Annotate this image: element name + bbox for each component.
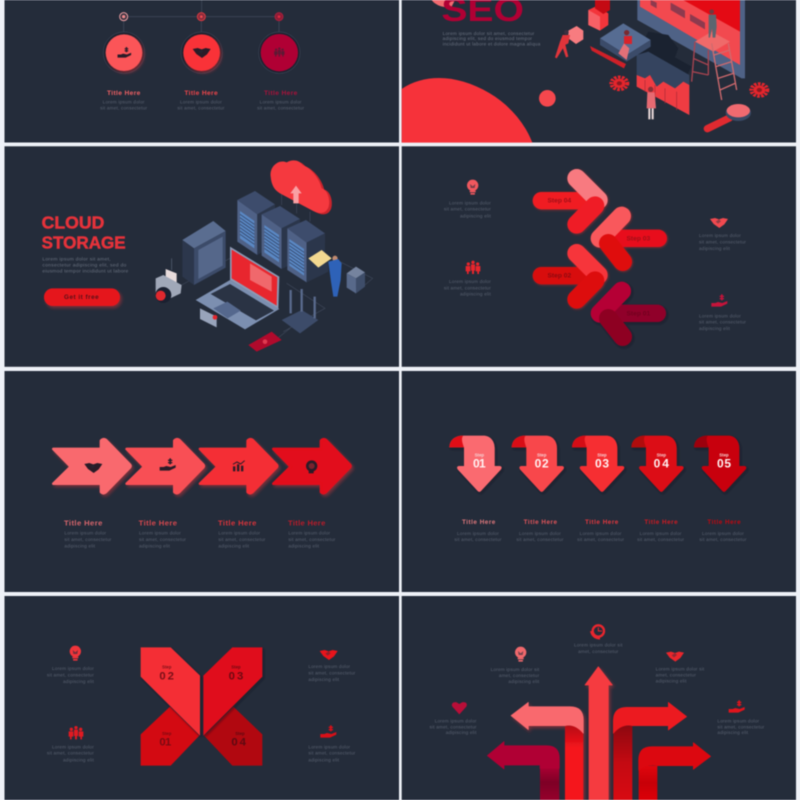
icon: camera bbox=[155, 258, 182, 303]
icon: router bbox=[282, 289, 318, 333]
text: bottom left: Lorem ipsum dolor bbox=[449, 279, 491, 284]
node 2 bbox=[197, 13, 205, 21]
text: far left: sit amet, consectetur bbox=[429, 724, 477, 729]
illustration: monitor bbox=[637, 0, 745, 78]
step 1 text: Title Here bbox=[64, 518, 102, 527]
step 3 text: sit amet, consectetur bbox=[257, 106, 304, 111]
step 3 text: Title Here bbox=[264, 90, 298, 97]
small circle bbox=[539, 90, 556, 107]
icon: server rack 2 bbox=[262, 206, 300, 269]
text: top left: sit amet, consectetur bbox=[444, 207, 491, 212]
step circle 2 bbox=[181, 32, 222, 73]
arrow 2 bbox=[127, 439, 204, 493]
arrow: step 02 bbox=[541, 253, 598, 299]
step 1 text bbox=[454, 519, 502, 542]
step 2 text: sit amet, consectetur bbox=[177, 106, 225, 111]
step 2 text: adipiscing elit bbox=[139, 544, 170, 549]
icon: server rack 1 bbox=[237, 191, 275, 255]
icon: cloud bbox=[271, 160, 332, 214]
step 3 text: sit amet, consectetur bbox=[218, 537, 266, 542]
segment 01: Step bbox=[162, 731, 172, 736]
text: left: adipiscing elit bbox=[508, 679, 540, 684]
panel: diverging arrows slide bbox=[402, 596, 796, 800]
text: top left: adipiscing elit bbox=[460, 213, 491, 218]
icon: drawer and worker bbox=[308, 250, 342, 297]
step 4 text: Lorem ipsum dolor bbox=[288, 531, 331, 536]
step 5 text: Lorem ipsum dolor bbox=[702, 531, 744, 536]
ribbon arrow 02: Step bbox=[537, 452, 547, 457]
text: right bbox=[656, 666, 705, 683]
step 4 text: Title Here bbox=[644, 519, 678, 526]
step labels bbox=[547, 198, 650, 317]
node 1 bbox=[120, 13, 128, 21]
step 5 text: Title Here bbox=[707, 519, 741, 526]
step 3 text: adipiscing elit bbox=[218, 544, 250, 549]
step 2 text: sit amet, consectetur bbox=[139, 537, 186, 542]
ribbon arrow 03: Step bbox=[597, 452, 607, 457]
step 1 text bbox=[64, 518, 112, 549]
timeline diagram bbox=[100, 0, 304, 111]
segment 01: 01 bbox=[159, 737, 171, 749]
connector lines bbox=[182, 193, 373, 342]
arrow: step 01 bbox=[600, 291, 657, 337]
text: bottom right: sit amet, consectetur bbox=[699, 320, 746, 325]
step 4 text: Title Here bbox=[288, 518, 325, 527]
step 3 text: Title Here bbox=[218, 518, 256, 527]
text: bottom right: adipiscing elit bbox=[308, 757, 340, 762]
icon: handshake bbox=[84, 463, 102, 473]
icon: lightbulb bbox=[467, 180, 478, 195]
text: top left: Lorem ipsum dolor bbox=[449, 200, 491, 205]
arrow: step 03 bbox=[600, 216, 658, 262]
segment 04: 04 bbox=[231, 737, 247, 749]
SEO graphic bbox=[402, 0, 767, 143]
text: top left: adipiscing elit bbox=[63, 679, 94, 684]
step 4 text bbox=[288, 518, 336, 549]
step 1 text: Lorem ipsum dolor bbox=[457, 531, 499, 536]
text: far right: sit amet, consectetur bbox=[717, 724, 765, 729]
text: top right: adipiscing elit bbox=[699, 246, 730, 251]
text: left: amet, consectetur bbox=[499, 673, 540, 678]
text: top right bbox=[308, 664, 356, 682]
decorative large circle bbox=[402, 78, 532, 143]
step 1 text: Lorem ipsum dolor bbox=[103, 99, 145, 104]
button: Get it free bbox=[64, 294, 99, 301]
arrow 1 bbox=[53, 439, 130, 493]
heading: STORAGE bbox=[42, 232, 126, 252]
text: top center bbox=[574, 643, 623, 654]
icon: money hand bbox=[160, 458, 176, 471]
step 2 text: sit amet, consectetur bbox=[516, 537, 564, 542]
icon: people bbox=[69, 726, 83, 739]
icon: big tower server bbox=[182, 221, 226, 285]
step 1 text: Lorem ipsum dolor bbox=[64, 531, 107, 536]
illustration: pencil bbox=[590, 46, 626, 68]
step 3 text: Title Here bbox=[585, 519, 619, 526]
step 1 text: sit amet, consectetur bbox=[100, 106, 147, 111]
paragraph: eiusmod tempor incididunt ut labore bbox=[42, 268, 129, 274]
illustration: person pushing box bbox=[555, 26, 583, 58]
illustration: cubes bbox=[588, 0, 610, 31]
icon: lightbulb bbox=[515, 647, 526, 662]
arrow: step 04 bbox=[541, 178, 598, 224]
step 2 text: Title Here bbox=[524, 519, 557, 526]
text: far right: Lorem ipsum dolor bbox=[717, 719, 760, 724]
segment 03: 03 bbox=[229, 670, 243, 682]
arrow: right red bbox=[613, 702, 687, 800]
text: bottom right bbox=[308, 744, 356, 762]
icon: people bbox=[466, 261, 480, 274]
node 3 bbox=[275, 13, 283, 21]
panel: butterfly X slide bbox=[4, 596, 399, 800]
text: far left: adipiscing elit bbox=[446, 730, 477, 735]
text: left: Lorem ipsum dolor sit bbox=[491, 667, 540, 672]
step 4 text bbox=[637, 519, 684, 542]
step 2 text: Lorem ipsum dolor bbox=[180, 99, 222, 104]
icon: chart bbox=[233, 461, 245, 471]
step 5 text: sit amet, consectetur bbox=[699, 537, 747, 542]
text: top right: Lorem ipsum dolor bbox=[699, 233, 741, 238]
illustration: chart block bbox=[637, 52, 689, 115]
step 2 text: Title Here bbox=[139, 518, 177, 527]
illustration: gear right bbox=[751, 84, 767, 96]
paragraph: consectetur adipiscing elit, sed do bbox=[42, 262, 127, 268]
button bbox=[44, 288, 120, 306]
text: bottom right: adipiscing elit bbox=[699, 326, 730, 331]
illustration: ladders and scaffold bbox=[692, 9, 737, 100]
segment 04 bbox=[204, 707, 262, 766]
icon: server rack 3 bbox=[287, 220, 325, 282]
step 4 text: sit amet, consectetur bbox=[288, 537, 336, 542]
text: bottom right: Lorem ipsum dolor bbox=[699, 313, 741, 318]
text: bottom left: adipiscing elit bbox=[460, 292, 491, 297]
step 2 text bbox=[177, 90, 225, 111]
step 1 text: Title Here bbox=[462, 519, 496, 526]
step 3 text bbox=[218, 518, 266, 549]
panel: arrows step slide bbox=[402, 146, 796, 367]
step 3 text: Lorem ipsum dolor bbox=[580, 531, 622, 536]
step labels: Step 02 bbox=[547, 272, 571, 279]
icon: photo card bbox=[200, 308, 217, 327]
text: top right: adipiscing elit bbox=[308, 677, 340, 682]
text: bottom left bbox=[444, 279, 491, 297]
text: top right: sit amet, consectetur bbox=[308, 671, 356, 676]
text: top center: Lorem ipsum dolor sit bbox=[574, 643, 623, 648]
paragraph: Lorem ipsum dolor sit amet, bbox=[42, 256, 111, 262]
illustration: platform and seated person bbox=[600, 23, 651, 62]
ribbon arrow 01 bbox=[449, 436, 502, 492]
text: bottom left: adipiscing elit bbox=[63, 757, 94, 762]
text: bottom right: sit amet, consectetur bbox=[308, 751, 356, 756]
text: right: Lorem ipsum dolor sit bbox=[656, 666, 705, 671]
arrow: far right bbox=[639, 743, 711, 800]
segment 04: Step bbox=[235, 731, 245, 736]
text: top left bbox=[444, 200, 491, 218]
text: bottom left: sit amet, consectetur bbox=[47, 751, 94, 756]
illustration: gear left bbox=[611, 77, 627, 90]
corner blob bbox=[432, 0, 455, 7]
segment 03 bbox=[203, 647, 262, 736]
arrow 3 bbox=[200, 439, 277, 493]
step labels: Step 03 bbox=[626, 235, 650, 242]
ribbon arrow 04: 04 bbox=[654, 457, 669, 471]
icon: money hand bbox=[729, 700, 745, 713]
paragraph bbox=[443, 31, 541, 46]
text: bottom left: sit amet, consectetur bbox=[444, 285, 491, 290]
ribbon arrow 01: Step bbox=[475, 452, 484, 457]
text: bottom left bbox=[47, 744, 94, 762]
panel: SEO slide bbox=[402, 0, 796, 143]
icon: lightbulb bbox=[70, 646, 81, 661]
illustration: woman bbox=[647, 87, 656, 119]
step 2 text: Title Here bbox=[184, 90, 218, 97]
step circle 3 bbox=[259, 32, 300, 73]
step 4 text: adipiscing elit bbox=[288, 544, 320, 549]
arrow: center up bbox=[585, 667, 612, 800]
step 1 text: sit amet, consectetur bbox=[64, 537, 112, 542]
step 4 text: sit amet, consectetur bbox=[637, 537, 684, 542]
icon: clock bbox=[591, 625, 604, 638]
text: far right: adipiscing elit bbox=[717, 730, 749, 735]
segment 02: 02 bbox=[159, 670, 174, 682]
step 1 text: Title Here bbox=[107, 90, 141, 97]
step 2 text: Lorem ipsum dolor bbox=[519, 531, 561, 536]
panel: horizontal arrows slide bbox=[4, 371, 399, 592]
step 3 text: Lorem ipsum dolor bbox=[260, 99, 302, 104]
step 3 text: sit amet, consectetur bbox=[577, 537, 624, 542]
arrow: far left dark bbox=[487, 742, 559, 800]
icon: handshake bbox=[666, 652, 684, 662]
paragraph: Lorem ipsum dolor sit amet, consectetur bbox=[443, 31, 535, 36]
step 2 text bbox=[139, 518, 186, 549]
paragraph bbox=[42, 256, 129, 274]
text: bottom right: Lorem ipsum dolor bbox=[308, 744, 351, 749]
ribbon arrow 02: 02 bbox=[535, 457, 549, 471]
text: bottom right bbox=[699, 313, 746, 331]
segment 02: Step bbox=[162, 664, 172, 669]
ribbon arrow 05 bbox=[694, 436, 746, 492]
heading: CLOUD bbox=[42, 212, 104, 232]
text: far right bbox=[717, 719, 765, 735]
step labels: Step 04 bbox=[547, 198, 571, 205]
step 4 text: Lorem ipsum dolor bbox=[640, 531, 682, 536]
panel: ribbon arrows slide bbox=[402, 371, 796, 592]
paragraph: incididunt ut labore et dolore magna aliqua bbox=[443, 41, 541, 46]
icon: handshake bbox=[710, 218, 728, 228]
step 2 text bbox=[516, 519, 564, 542]
panel: cloud storage slide bbox=[4, 146, 399, 367]
arrow 4 bbox=[273, 439, 350, 493]
step labels: Step 01 bbox=[626, 310, 650, 317]
illustration: magnifier bbox=[707, 104, 751, 129]
segment 01 bbox=[141, 707, 199, 766]
ribbon arrow 01: 01 bbox=[473, 457, 486, 471]
step 1 text: sit amet, consectetur bbox=[454, 537, 502, 542]
text: top left: sit amet, consectetur bbox=[47, 673, 94, 678]
text: far left: Lorem ipsum dolor bbox=[435, 719, 477, 724]
heading bbox=[42, 212, 126, 252]
step 3 text: Lorem ipsum dolor bbox=[218, 531, 261, 536]
segment 02 bbox=[141, 647, 200, 736]
paragraph: adipiscing elit, sed do eiusmod tempor bbox=[443, 36, 532, 41]
icon: small server bbox=[347, 267, 365, 293]
text: top right: Lorem ipsum dolor bbox=[308, 664, 351, 669]
icon: money hand bbox=[320, 725, 336, 738]
text: top left bbox=[47, 666, 94, 684]
step circle 1 bbox=[103, 32, 145, 73]
icon: laptop bbox=[196, 247, 279, 329]
ribbon arrow 02 bbox=[512, 436, 564, 492]
icon: head bbox=[306, 460, 317, 473]
step 5 text bbox=[699, 519, 747, 542]
icon: handshake bbox=[320, 650, 338, 660]
text: top center: amet, consectetur bbox=[578, 649, 619, 654]
icon: phone bbox=[248, 332, 282, 352]
text: left bbox=[491, 667, 540, 684]
text: top left: Lorem ipsum dolor bbox=[52, 666, 94, 671]
panel: timeline slide bbox=[4, 0, 399, 142]
ribbon arrow 04 bbox=[631, 436, 684, 492]
ribbon arrow 05: 05 bbox=[717, 457, 731, 471]
text: top right: sit amet, consectetur bbox=[699, 239, 746, 244]
step 2 text: Lorem ipsum dolor bbox=[139, 531, 181, 536]
text: right: amet, consectetur bbox=[656, 672, 696, 677]
step 3 text bbox=[257, 90, 304, 111]
arrow: left pink bbox=[511, 702, 583, 800]
step 3 text bbox=[577, 519, 624, 542]
icon: heart people bbox=[452, 702, 467, 714]
icon: money hand bbox=[711, 294, 727, 307]
ribbon arrow 03: 03 bbox=[595, 457, 609, 471]
ribbon arrow 05: Step bbox=[719, 452, 729, 457]
text: bottom left: Lorem ipsum dolor bbox=[52, 744, 94, 749]
text: top right bbox=[699, 233, 746, 251]
step 1 text bbox=[100, 90, 147, 111]
text: right: adipiscing elit bbox=[656, 678, 687, 683]
step 1 text: adipiscing elit bbox=[64, 544, 96, 549]
text: far left bbox=[429, 719, 477, 735]
ribbon arrow 03 bbox=[572, 436, 624, 492]
segment 03: Step bbox=[231, 664, 241, 669]
ribbon arrow 04: Step bbox=[657, 452, 666, 457]
